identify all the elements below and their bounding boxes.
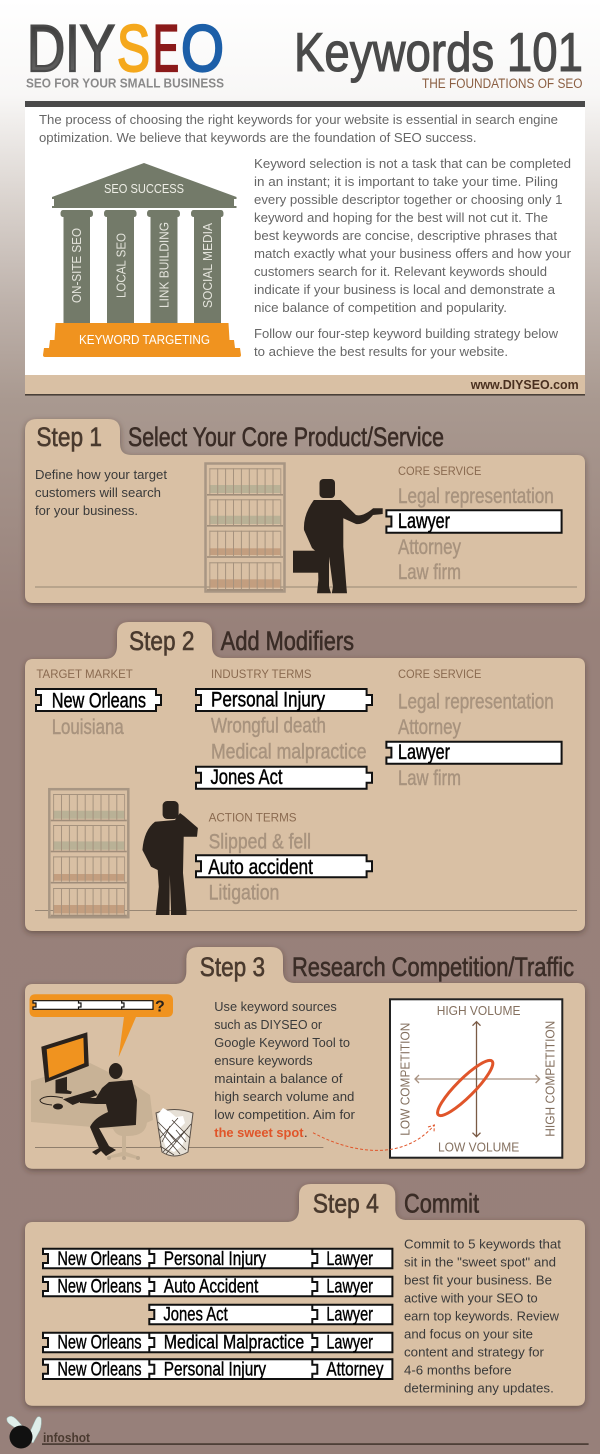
step 3 label: Step 3: [200, 952, 265, 982]
keyword row 3: Lawyer: [326, 1305, 374, 1326]
keyword row 1: New Orleans: [57, 1249, 142, 1270]
core service list: Lawyer: [398, 510, 450, 533]
website url: www.DIYSEO.com: [470, 377, 579, 392]
core service list: Law firm: [398, 561, 461, 584]
step 4 description: content and strategy for: [404, 1344, 545, 1359]
industry terms list: Medical malpractice: [211, 740, 367, 763]
step 4 description: and focus on your site: [404, 1326, 533, 1341]
step 2 label: Step 2: [129, 626, 194, 656]
step 4 description: sit in the "sweet spot" and: [404, 1254, 556, 1269]
core service list: CORE SERVICE: [398, 464, 481, 478]
body text: Keyword selection is not a task that can be completed: [254, 156, 571, 171]
keyword row 4: Medical Malpractice: [164, 1333, 304, 1354]
panel: step 2: [25, 622, 585, 931]
target market list: [36, 667, 161, 739]
keyword row 2: [43, 1277, 392, 1298]
keyword row 2: Auto Accident: [164, 1277, 259, 1298]
body text: every possible descriptor together or choosing only 1: [254, 192, 562, 207]
step 3 description: Use keyword sources: [214, 999, 337, 1014]
target market list: New Orleans: [52, 690, 146, 712]
step 4 description: Commit to 5 keywords that: [404, 1236, 561, 1251]
subtitle: THE FOUNDATIONS OF SEO: [422, 76, 582, 91]
keyword row 5: Personal Injury: [164, 1360, 266, 1381]
logo: DIYSEO: O: [181, 11, 224, 85]
step 3 description: low competition. Aim for: [214, 1107, 356, 1122]
panel: step 4: [25, 1184, 585, 1406]
industry terms list: Jones Act: [210, 766, 283, 789]
body text: indicate if your business is local and demonstrate a: [254, 282, 556, 297]
core service list: Lawyer: [398, 741, 450, 764]
step 4 label: Step 4: [313, 1188, 379, 1218]
body text: keyword and hoping for the best will not cut it. The: [254, 210, 548, 225]
step 3 description: such as DIYSEO or: [214, 1017, 323, 1032]
intro text: optimization. We believe that keywords are the foundation of SEO success.: [39, 130, 476, 145]
step 1 description: for your business.: [35, 503, 138, 518]
chart: sweet spot: LOW COMPETITION: [398, 1023, 412, 1136]
footer: infoshot logo: [7, 1416, 589, 1448]
footer: infoshot logo: infoshot: [43, 1430, 91, 1445]
temple diagram: SEO success: SOCIAL MEDIA: [201, 222, 215, 308]
step 4 description: [404, 1236, 561, 1395]
body text: match exactly what your business offers and how your: [254, 246, 572, 261]
icon: file shelf: [49, 789, 128, 917]
callout: keyword question: ?: [155, 999, 165, 1016]
step 1 description: [35, 467, 167, 518]
core service list: [386, 667, 562, 790]
keyword row 1: [43, 1249, 392, 1270]
industry terms list: [196, 667, 372, 789]
body text: [254, 156, 572, 359]
logo: DIYSEO: [26, 11, 224, 90]
action terms list: [196, 811, 372, 904]
step 1 label: Step 1: [36, 422, 102, 452]
temple diagram: SEO success: ON-SITE SEO: [70, 228, 84, 303]
keyword row 5: [43, 1359, 392, 1381]
icon: waste basket: [156, 1108, 193, 1156]
step 4 description: best fit your business. Be: [404, 1272, 552, 1287]
target market list: TARGET MARKET: [36, 667, 133, 681]
core service list: [386, 464, 562, 584]
temple diagram: SEO success: LINK BUILDING: [158, 222, 172, 308]
core service list: Legal representation: [398, 691, 554, 714]
core service list: Legal representation: [398, 485, 554, 508]
keyword row 5: New Orleans: [57, 1360, 142, 1381]
icon: businessman pointing: [293, 479, 383, 593]
keyword row 5: Attorney: [326, 1360, 384, 1381]
step 1 heading: Select Your Core Product/Service: [128, 422, 444, 452]
step 4 description: active with your SEO to: [404, 1290, 538, 1305]
step 4 description: earn top keywords. Review: [404, 1308, 560, 1323]
core service list: Attorney: [398, 716, 461, 739]
body text: in an instant; it is important to take your time. Piling: [254, 174, 558, 189]
action terms list: Litigation: [209, 881, 279, 904]
temple diagram: SEO success: KEYWORD TARGETING: [79, 332, 210, 347]
action terms list: ACTION TERMS: [209, 811, 297, 825]
chart: sweet spot: [390, 999, 562, 1158]
industry terms list: Wrongful death: [211, 715, 326, 738]
step 3 description: .: [304, 1125, 308, 1140]
target market list: Louisiana: [52, 716, 124, 739]
keyword row 4: [43, 1333, 392, 1354]
panel: introduction: [25, 101, 585, 396]
keyword row 2: Lawyer: [326, 1277, 374, 1298]
illustration: man at computer: [31, 1032, 153, 1160]
logo: DIYSEO: DIY: [27, 11, 115, 85]
body text: Follow our four-step keyword building strategy below: [254, 326, 559, 341]
industry terms list: INDUSTRY TERMS: [211, 667, 312, 681]
arrow: dashed pointer to sweet spot: [313, 1125, 434, 1150]
keyword row 1: Lawyer: [326, 1249, 374, 1270]
body text: nice balance of competition and popularity.: [254, 300, 507, 315]
logo: DIYSEO: SEO FOR YOUR SMALL BUSINESS: [26, 76, 224, 90]
step 3 description: maintain a balance of: [214, 1071, 343, 1086]
step 4 description: 4-6 months before: [404, 1362, 512, 1377]
core service list: Attorney: [398, 536, 461, 559]
step 3 description: [214, 999, 356, 1140]
step 3 description: the sweet spot: [214, 1125, 304, 1140]
core service list: Law firm: [398, 767, 461, 790]
intro text: [39, 112, 558, 145]
temple diagram: SEO success: LOCAL SEO: [114, 233, 128, 298]
step 3 description: ensure keywords: [214, 1053, 313, 1068]
industry terms list: Personal Injury: [211, 689, 325, 712]
keyword row 3: [149, 1305, 392, 1326]
core service list: CORE SERVICE: [398, 667, 481, 681]
step 1 description: Define how your target: [35, 467, 167, 482]
icon: file shelf: [206, 464, 284, 592]
body text: to achieve the best results for your website.: [254, 344, 508, 359]
body text: best keywords are concise, descriptive phrases that: [254, 228, 557, 243]
step 4 heading: Commit: [404, 1188, 479, 1218]
step 2 heading: Add Modifiers: [221, 626, 354, 656]
step 3 description: Google Keyword Tool to: [214, 1035, 350, 1050]
intro text: The process of choosing the right keywords for your website is essential in search engine: [39, 112, 558, 127]
chart: sweet spot: HIGH VOLUME: [437, 1003, 521, 1018]
keyword row 3: Jones Act: [163, 1305, 228, 1326]
temple diagram: SEO success: [43, 163, 241, 357]
logo: DIYSEO: E: [153, 11, 179, 85]
keyword row 4: Lawyer: [326, 1333, 374, 1354]
keyword row 2: New Orleans: [57, 1277, 142, 1298]
step 3 description: high search volume and: [214, 1089, 354, 1104]
step 4 description: determining any updates.: [404, 1380, 554, 1395]
action terms list: Slipped & fell: [209, 830, 311, 853]
chart: sweet spot: HIGH COMPETITION: [542, 1021, 558, 1137]
step 1 description: customers will search: [35, 485, 161, 500]
action terms list: Auto accident: [208, 856, 313, 879]
body text: customers search for it. Relevant keywords should: [254, 264, 547, 279]
callout: keyword question: [30, 994, 173, 1057]
keyword row 4: New Orleans: [57, 1333, 142, 1354]
panel: step 1: [25, 419, 585, 603]
panel: step 3: [25, 947, 585, 1169]
icon: man on phone: [142, 801, 198, 915]
temple diagram: SEO success: SEO SUCCESS: [104, 182, 184, 196]
chart: sweet spot: LOW VOLUME: [438, 1140, 520, 1155]
keyword row 1: Personal Injury: [164, 1249, 266, 1270]
logo: DIYSEO: S: [117, 11, 150, 85]
